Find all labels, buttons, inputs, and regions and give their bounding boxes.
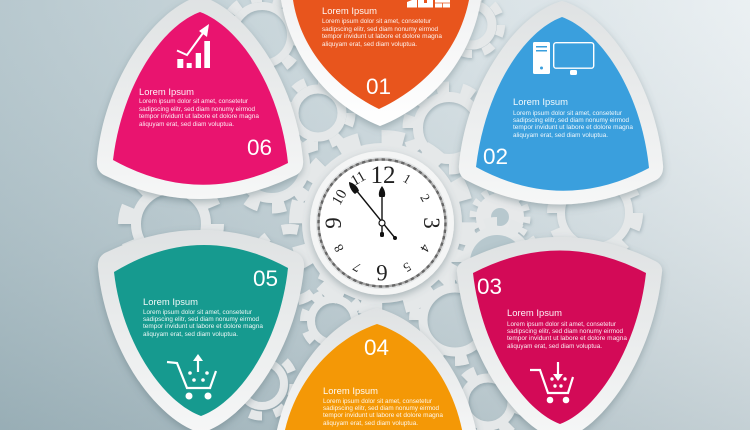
- clock numerals: 10: [329, 187, 351, 208]
- panel shape 02: [459, 1, 663, 204]
- body text 03: aliquyam erat, sed diam voluptua.: [507, 343, 602, 350]
- icon: cart with down arrow: [530, 362, 573, 403]
- body text 02: aliquyam erat, sed diam voluptua.: [513, 132, 608, 139]
- body text 03: sadipscing elitr, sed diam nonumy eirmod: [507, 328, 623, 335]
- body text 03: [507, 321, 627, 350]
- panel: 02: [459, 1, 663, 204]
- clock numerals: 5: [401, 259, 414, 276]
- heading 04: Lorem Ipsum: [323, 386, 378, 397]
- body text 02: sadipscing elitr, sed diam nonumy eirmod: [513, 117, 629, 124]
- panel shape 04: [275, 308, 478, 430]
- number 04: 04: [364, 335, 389, 360]
- clock numerals: 11: [348, 168, 369, 189]
- clock numerals: 3: [419, 217, 444, 229]
- panel shape 05: [98, 230, 304, 430]
- body text 01: Lorem ipsum dolor sit amet, consetetur: [322, 18, 431, 25]
- body text 04: [323, 398, 443, 427]
- number 05: 05: [253, 266, 278, 291]
- body text 06: aliquyam erat, sed diam voluptua.: [139, 121, 234, 128]
- panel shape 06: [97, 0, 303, 199]
- number 01: 01: [366, 74, 391, 99]
- body text 05: Lorem ipsum dolor sit amet, consetetur: [143, 309, 252, 316]
- body text 02: tempor invidunt ut labore et dolore magna: [513, 124, 633, 131]
- heading 02: Lorem Ipsum: [513, 97, 568, 108]
- icon: cart with up arrow: [167, 354, 216, 400]
- gears behind panels: [125, 0, 637, 430]
- heading 01: Lorem Ipsum: [322, 6, 377, 17]
- heading 06: Lorem Ipsum: [139, 87, 194, 98]
- body text 03: tempor invidunt ut labore et dolore magna: [507, 335, 627, 342]
- panel shape 03: [457, 237, 662, 430]
- panel: 06: [97, 0, 303, 199]
- icon: rising bar chart: [177, 24, 210, 68]
- clock face: [310, 151, 454, 295]
- panel: 04: [275, 308, 478, 430]
- body text 05: tempor invidunt ut labore et dolore magna: [143, 323, 263, 330]
- clock numerals: [321, 162, 444, 285]
- body text 06: [139, 98, 259, 128]
- panel: 01: [281, 0, 481, 126]
- clock numerals: 1: [401, 170, 414, 187]
- body text 02: Lorem ipsum dolor sit amet, consetetur: [513, 110, 622, 117]
- number 02: 02: [483, 144, 508, 169]
- body text 01: sadipscing elitr, sed diam nonumy eirmod: [322, 26, 438, 33]
- clock numerals: 8: [330, 242, 347, 255]
- body text 05: sadipscing elitr, sed diam nonumy eirmod: [143, 316, 259, 323]
- icon: desktop computer: [533, 42, 594, 75]
- clock hands: [349, 182, 397, 240]
- body text 04: sadipscing elitr, sed diam nonumy eirmod: [323, 405, 439, 412]
- panel shape 01: [281, 0, 481, 126]
- clock numerals: 4: [417, 242, 434, 255]
- clock numerals: 7: [350, 259, 363, 276]
- body text 01: aliquyam erat, sed diam voluptua.: [322, 41, 417, 48]
- clock numerals: 2: [417, 191, 434, 204]
- body text 01: tempor invidunt ut labore et dolore magna: [322, 33, 442, 40]
- body text 06: tempor invidunt ut labore et dolore magna: [139, 113, 259, 120]
- body text 02: [513, 110, 633, 139]
- body text 05: [143, 309, 263, 338]
- clock numerals: 6: [376, 260, 388, 285]
- body text 05: aliquyam erat, sed diam voluptua.: [143, 331, 238, 338]
- body text 01: [322, 18, 442, 48]
- heading 05: Lorem Ipsum: [143, 297, 198, 308]
- body text 04: tempor invidunt ut labore et dolore magna: [323, 412, 443, 419]
- heading 03: Lorem Ipsum: [507, 308, 562, 319]
- clock: [310, 151, 454, 295]
- body text 06: sadipscing elitr, sed diam nonumy eirmod: [139, 106, 255, 113]
- body text 04: aliquyam erat, sed diam voluptua.: [323, 420, 418, 427]
- number 06: 06: [247, 135, 272, 160]
- body text 03: Lorem ipsum dolor sit amet, consetetur: [507, 321, 616, 328]
- body text 06: Lorem ipsum dolor sit amet, consetetur: [139, 98, 248, 105]
- icon: buildings and boxes: [407, 0, 450, 8]
- clock numerals: 9: [321, 217, 346, 229]
- panel: 05: [98, 230, 304, 430]
- body text 04: Lorem ipsum dolor sit amet, consetetur: [323, 398, 432, 405]
- clock numerals: 12: [370, 162, 396, 189]
- panel: 03: [457, 237, 662, 430]
- number 03: 03: [477, 274, 502, 299]
